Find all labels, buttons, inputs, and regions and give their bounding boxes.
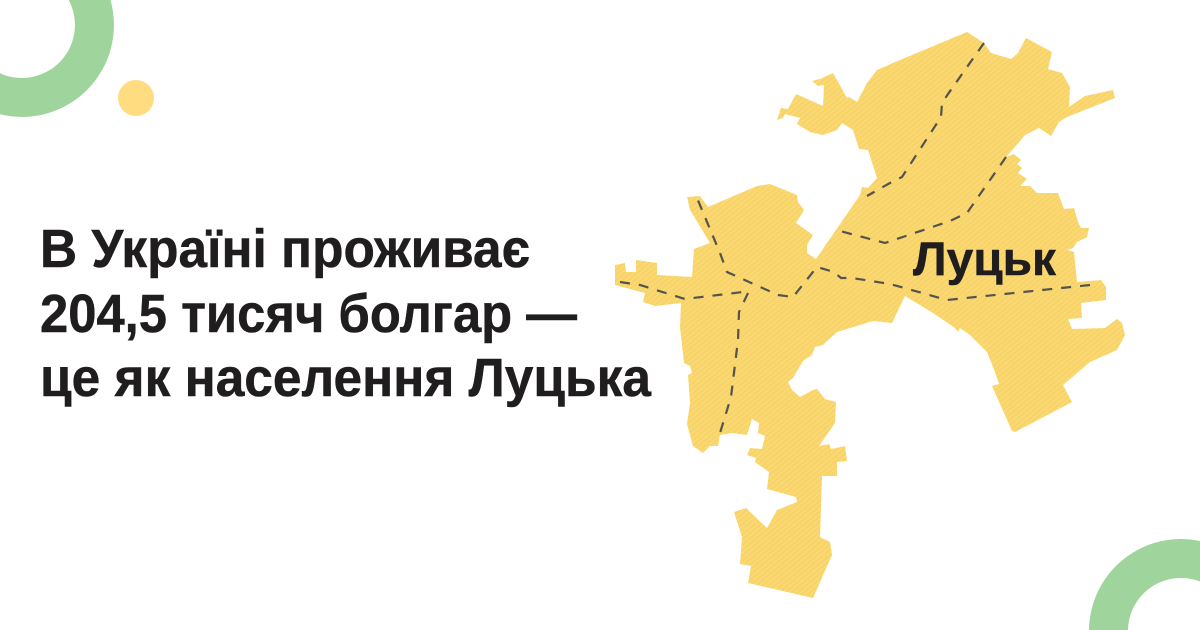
district borders (620, 43, 1090, 433)
decorative dot: yellow (118, 80, 154, 116)
title: це як населення Луцька (40, 348, 652, 408)
title: 204,5 тисяч болгар — (40, 284, 577, 344)
title (40, 219, 652, 408)
title: В Україні проживає (40, 219, 530, 279)
decorative ring: bottom right (1089, 539, 1200, 630)
decorative ring: top left (0, 0, 114, 117)
map of Lutsk (615, 32, 1125, 598)
map outline (615, 32, 1125, 598)
map label: Луцьк (913, 232, 1056, 285)
